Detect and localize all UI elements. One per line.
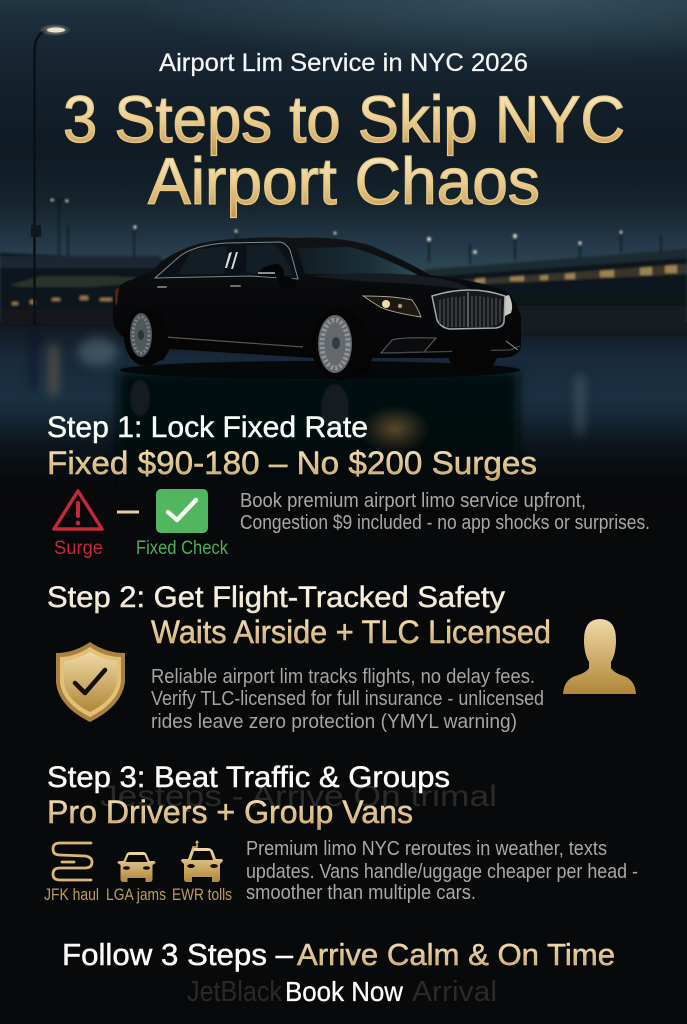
icon: gold shield with check	[56, 642, 125, 722]
step 2 heading: Step 2: Get Flight-Tracked Safety	[47, 581, 505, 614]
tail light	[115, 287, 119, 306]
grille	[432, 290, 505, 329]
main title line 1: 3 Steps to Skip NYC	[63, 82, 625, 156]
ghost text behind call to action: JetBlack	[187, 976, 282, 1008]
far front tyre	[449, 345, 495, 371]
header	[63, 49, 625, 218]
fixed check label: Fixed Check	[136, 538, 228, 559]
icon labels: LGA jams	[106, 885, 166, 904]
step 1 body text	[240, 490, 650, 534]
step 1 body text: Book premium airport limo service upfront,	[240, 490, 586, 512]
step 3 subheading: Pro Drivers + Group Vans	[47, 794, 413, 830]
left terminal bridge	[0, 253, 165, 325]
step 2 body text: rides leave zero protection (YMYL warning)	[151, 711, 517, 733]
limousine	[113, 237, 521, 380]
icon labels: JFK haul	[44, 885, 99, 904]
side mirror	[259, 264, 296, 289]
dash between icons	[117, 510, 139, 514]
step 1 subheading: Fixed $90-180 – No $200 Surges	[47, 445, 537, 481]
step 2 subheading: Waits Airside + TLC Licensed	[151, 614, 551, 650]
car shadow	[120, 361, 520, 379]
icon: fixed check square	[156, 489, 208, 533]
side windows	[155, 242, 298, 279]
lower bumper trim	[381, 338, 436, 353]
wet ground reflections	[32, 330, 582, 502]
rear wheel	[124, 308, 168, 366]
panel: step 2	[47, 581, 636, 733]
headlight	[363, 296, 421, 317]
icon: JFK winding road	[53, 843, 92, 880]
wheel reflections	[130, 380, 349, 432]
right terminal bridge	[425, 249, 687, 335]
hood sheen	[310, 273, 470, 290]
closing white text: Follow 3 Steps –	[62, 937, 294, 972]
front wheel	[311, 308, 369, 380]
icon: surge warning triangle	[54, 491, 102, 529]
ghost text behind call to action: Arrival	[412, 976, 497, 1008]
door handles	[157, 286, 167, 288]
distant lights	[51, 199, 622, 254]
panel: step 3	[44, 761, 638, 904]
closing gold text: Arrive Calm & On Time	[297, 937, 615, 972]
car body	[113, 237, 521, 377]
ghost text behind step 3: Jesteps - Arrive On trimal	[100, 780, 497, 813]
ghost text behind call to action	[187, 976, 497, 1008]
step 3 body text: Premium limo NYC reroutes in weather, texts	[246, 838, 607, 860]
surge label: Surge	[54, 538, 103, 559]
step 3 body text	[246, 838, 638, 904]
lamp post	[31, 24, 71, 325]
body line highlights	[165, 337, 303, 347]
step 2 body text	[151, 666, 544, 733]
icon: LGA car	[118, 852, 156, 882]
window light streaks	[225, 252, 238, 269]
call to action: Book Now	[285, 976, 404, 1007]
subtitle: Airport Lim Service in NYC 2026	[159, 49, 528, 77]
step 3 body text: smoother than multiple cars.	[246, 882, 476, 904]
step 1 heading: Step 1: Lock Fixed Rate	[47, 411, 368, 444]
step 2 body text: Verify TLC-licensed for full insurance - unlicensed	[151, 688, 544, 710]
icon: EWR car with toll marker	[181, 840, 223, 882]
windshield	[297, 247, 418, 275]
distant light poles	[54, 200, 661, 264]
panel: step 1	[47, 411, 650, 559]
icon: gold person silhouette	[563, 619, 636, 694]
main title line 2: Airport Chaos	[148, 144, 540, 218]
fade into black panel	[0, 420, 687, 510]
closing line	[62, 937, 615, 972]
icon labels: EWR tolls	[172, 885, 232, 904]
far headlight	[505, 295, 512, 316]
step 3 body text: updates. Vans handle/uggage cheaper per head -	[246, 861, 638, 883]
icon labels	[44, 885, 232, 904]
background scene: stormy airport at night	[0, 0, 687, 510]
step 3 heading: Step 3: Beat Traffic & Groups	[47, 761, 450, 794]
step 2 body text: Reliable airport lim tracks flights, no delay fees.	[151, 666, 535, 688]
